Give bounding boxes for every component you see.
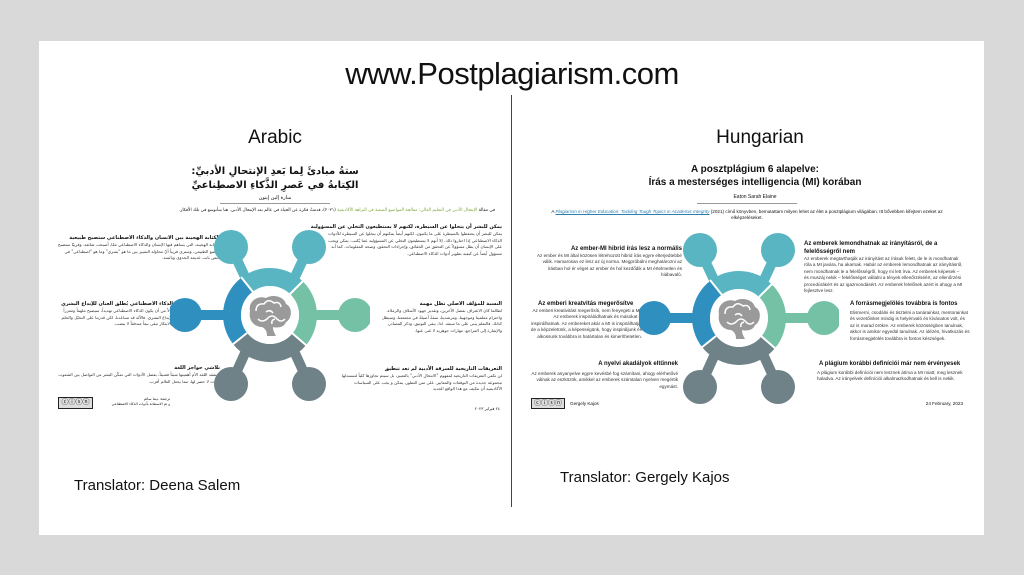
arabic point 2: بدلاً من أن يكون الذكاء الاصطناعي تهديداً، سيصبح ملهماً ومعززاً للإبداع البشري. فالآلة قد تساعدنا، لكن قدرتنا على التخيّل والحلم والابتكار تبقى نبعاً متدفقاً لا ينضب. xyxy=(62,308,173,326)
slide background xyxy=(39,41,984,535)
arabic point 3 xyxy=(58,365,220,384)
icon: brain xyxy=(250,296,291,336)
arabic point 3: ستفقد اللغة الأم أهميتها شيئاً فشيئاً، بفضل الأدوات التي تمكّن البشر من التواصل بين الشعوب بلغات لا حصر لها، مما يجعل العالم أقرب. xyxy=(58,372,220,384)
hungarian point 3: Az emberek anyanyelve egyre kevésbé fog számítani, ahogy elérhetővé válnak az eszközök, amikkel az emberek számtalan nyelven megértik egymást. xyxy=(531,371,678,389)
hungarian point 4: Az emberek megtarthatják az irányítást az írásuk felett, de le is mondhatnak róla a MI javára, ha akarnak. Habár az emberek lemondhatnak az irányításról, nem mondhatnak le a felelősségről, hogy mi lett írva. Az emberek képesek – és muszáj nekik – felelősséget vállalni a tények ellenőrzéséért, az ellenőrzési procedúrákért és az igazmondásért. Az emberek felelősek azért is ahogy a MI fejlesztve lesz. xyxy=(804,256,963,293)
arabic title xyxy=(191,164,359,192)
arabic point 2: الذكاء الاصطناعي يُطلق العنان للإبداع البشري xyxy=(61,301,173,307)
hub diagram: Hungarian xyxy=(639,233,839,404)
heading: Hungarian: Hungarian xyxy=(716,127,804,148)
hungarian title: A posztplágium 6 alapelve: xyxy=(691,164,819,175)
hungarian point 6 xyxy=(817,360,963,381)
arabic point 6 xyxy=(342,365,502,391)
hungarian translator credit: Gergely Kajos xyxy=(570,401,599,406)
hungarian point 1: Az ember-MI hibrid írás lesz a normális xyxy=(571,246,682,252)
arabic point 4 xyxy=(311,223,502,256)
hungarian point 6: A plágium korábbi definíciói nem lesznek átírva a MI miatt; meg lesznek haladva. Az irányelvek definíciói alkalmazkodhatnak és kell is nekik. xyxy=(817,370,963,381)
arabic author: سارة إلين إيتون xyxy=(259,195,291,201)
hungarian point 1: Az ember és MI által közösen létrehozott hibrid írás egyre elterjedtebbé válik. Hamarosan ez lesz az új norma. Megpróbálni meghatározni az írásban hol ér véget az ember és hol kezdődik a MI értelmetlen és hiábavaló. xyxy=(537,253,682,277)
arabic translator credit xyxy=(112,397,170,406)
arabic translator credit: ترجمة: ديما سالم xyxy=(144,397,170,401)
arabic title: الكِتابةُ في عَصرِ الذَّكاءِ الاصطِناعيِّ xyxy=(192,180,358,191)
arabic point 3: تلاشي حواجز اللغة xyxy=(174,365,220,371)
translator: Arabic: Translator: Deena Salem xyxy=(74,477,240,494)
arabic intro: في مقالة الإنتحال الأدبي في التعليم العالي: معالجة المواضيع الصعبة في النزاهة الأكاديمية (٢٠٢١)، قدمتُ فكرة عن الحياة في عالم بعد الإنتحال الأدبي. هنا سأتوسع في تلك الأفكار. xyxy=(179,208,495,213)
heading: Arabic: Arabic xyxy=(248,127,302,148)
hungarian date: 24 February, 2023 xyxy=(926,401,963,406)
translator: Hungarian: Translator: Gergely Kajos xyxy=(560,469,730,486)
hungarian title xyxy=(649,164,861,188)
hungarian point 6: A plágium korábbi definíciói már nem érvényesek xyxy=(819,361,960,367)
arabic point 6: التعريفات التاريخية للسرقة الأدبية لم تعد تنطبق xyxy=(385,366,502,372)
hungarian point 2: Az emberi kreativitást megerősíti, nem fenyegeti a MI. Az emberek inspirálódhatnak és másokat is inspirálhatnak. Az embereket akár a MI is inspirálhatja, de a képzeletünk, a képességünk, hogy inspiráljunk és alkossunk továbbra is határtalan és kimeríthetetlen. xyxy=(531,308,642,339)
arabic point 1: الكتابة الهجينة بين الانسان والذكاء الاصطناعي ستصبح طبيعية xyxy=(69,235,220,241)
arabic translator credit: و تم الاستعانة بأدوات الذكاء الاصطناعي xyxy=(112,402,170,406)
arabic point 5: النسبة للمؤلف الاصلي تظل مهمة xyxy=(420,301,502,307)
hungarian intro: A Plagiarism in Higher Education: Tackling Tough Topics in Academic Integrity (2021) című könyvben, bemutattam milyen lehet az élet a posztplágium világában. Itt bővebben kifejtem ezeket az elképzeléseket. xyxy=(551,209,943,220)
icon: cc license hungarian: ⓒⓘⓢⓝ xyxy=(534,400,562,407)
arabic point 4: يمكن للبشر أن يتخلوا عن السيطرة، لكنهم لا يستطيعون التخلي عن المسؤولية xyxy=(311,224,502,230)
icon: cc license arabic xyxy=(58,397,93,409)
hungarian point 4: Az emberek lemondhatnak az irányításról, de a felelősségről nem xyxy=(804,241,937,255)
hungarian author: Eaton Sarah Elaine xyxy=(733,194,777,200)
hungarian point 3 xyxy=(531,360,678,389)
hungarian title: Írás a mesterséges intelligencia (MI) korában xyxy=(649,177,861,188)
icon: cc license hungarian xyxy=(531,398,565,409)
divider xyxy=(511,95,512,507)
arabic point 4: يمكن للبشر أن يحتفظوا بالسيطرة على ما يكتبون، لكنهم أيضاً يمكنهم أن يتخلوا عن السيطرة للأدوات الذكاء الاصطناعي إذا اختاروا ذلك. إلا أنهم لا يستطيعون التخلي عن المسؤولية عما يُكتب. يمكن ويجب على الإنسان أن يظل مسؤولاً عن التحقق من الحقائق، وإجراءات التحقق، وصحة المعلومات. كما أنه مسؤول أيضاً عن كيفية تطوير أدوات الذكاء الاصطناعي. xyxy=(328,231,502,256)
panel: Hungarian infographic xyxy=(531,164,970,409)
arabic date: ٢٤ فبراير ٢٠٢٣ xyxy=(475,406,500,411)
hungarian point 2: Az emberi kreatvitás megerősítve xyxy=(538,301,633,307)
panel: Arabic infographic xyxy=(58,164,502,411)
hungarian point 5: A forrásmegjelölés továbbra is fontos xyxy=(850,301,957,307)
icon: brain xyxy=(719,299,760,339)
arabic point 1: الكتابة الهجينة، التي يساهم فيها الإنسان والذكاء الاصطناعي معًا، أصبحت شائعة. وقريبًا ستصبح الوضع الطبيعي، وسترى قريباً أنّ محاولة التمييز بين ما هو "بشري" وما هو "اصطناعي" في النص باتت عديمة الجدوى وبائسة. xyxy=(58,242,220,260)
icon: cc license arabic: ⓒⓘⓢⓝ xyxy=(62,399,90,406)
arabic point 6: لن تكفي التعريفات التاريخية لمفهوم "الانتحال الأدبي" بالتعبير، بل سيتم تجاوزها كلياً لتستبدلها مجموعة جديدة من التوقعات والمعايير. على متن التطور، يمكن و يجب على السياسات الأكاديمية أن تتكيف مع هذا الواقع الجديد xyxy=(342,373,502,391)
hungarian point 3: A nyelvi akadályok eltűnnek xyxy=(598,361,678,367)
hub diagram: Arabic xyxy=(170,230,370,401)
hungarian point 5: Elismerni, csodálni és tisztelni a tanárainkat, mentorainkat és vezetőinket mindig is helyénvaló és kívánatos volt, és az is marad örökre. Az emberek közösségben tanulnak, akkor is amikor egyedül tanulnak. Az idézés, hivatkozás és forrásmegjelölés továbbra is fontos készségek. xyxy=(850,310,970,341)
title: www.Postplagiarism.com xyxy=(345,56,679,91)
arabic title: ستةُ مبادئَ لِما بَعدِ الإنتحالِ الأدبيِّ: xyxy=(191,166,359,177)
arabic point 5: لطالما كان الاعتراف بفضل الآخرين، وتقدير جهود الأسلاف والزملاء، واحترام معلمينا وموجهينا، ومرشدينا، سمةً أصيلةً في مجتمعنا، وسيظل كذلك. فالتعلم يبنى على ما سبقه. لذا، يبقى التوثيق، وذكر المصادر، والإشارة إلى المراجع، مهارات جوهرية لا غنى عنها. xyxy=(382,308,502,333)
